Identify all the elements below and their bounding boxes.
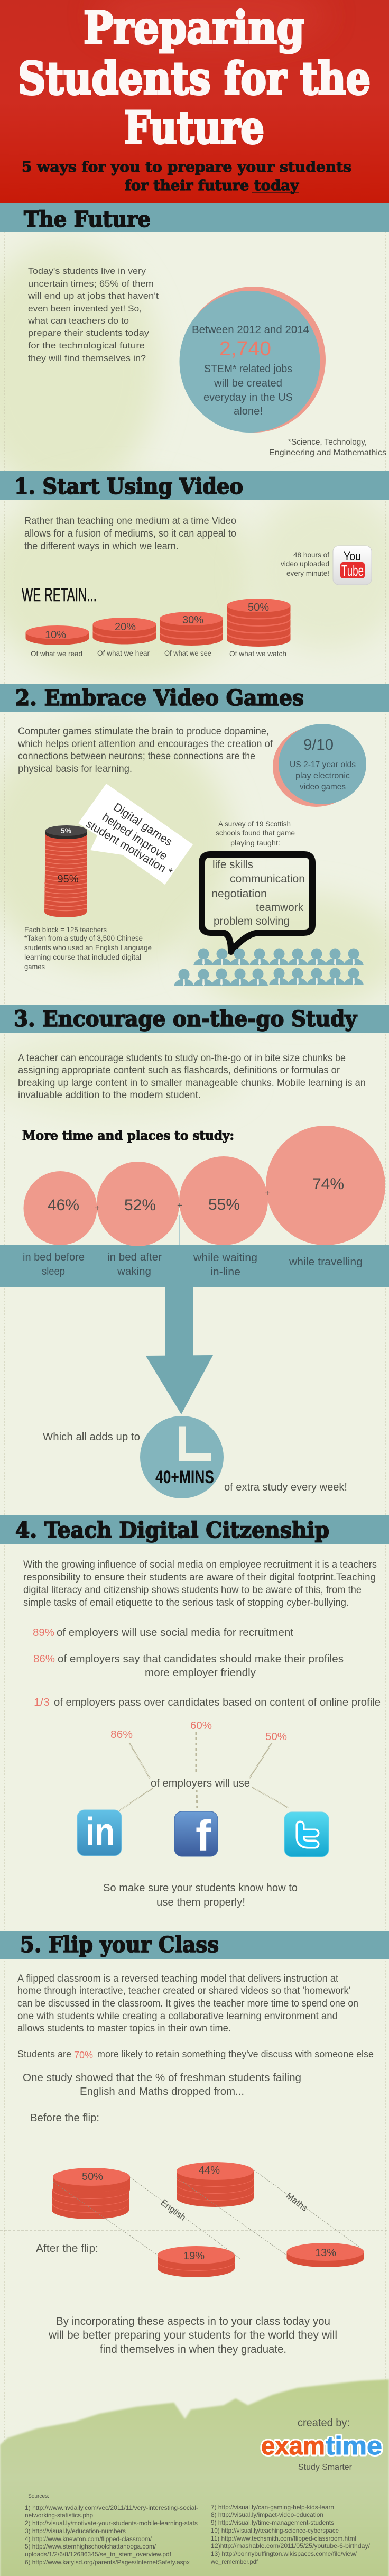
percentages: 86% xyxy=(110,1729,133,1741)
intro paragraph: uncertain times; 65% of them xyxy=(28,279,154,289)
games paragraph: physical basis for learning. xyxy=(18,763,132,775)
sources column left xyxy=(25,2504,198,2566)
credit: examtime logo: time xyxy=(326,2432,382,2460)
teachers footnote: *Taken from a study of 3,500 Chinese xyxy=(24,934,143,942)
heading: we retain: WE RETAIN... xyxy=(22,585,97,605)
sources column left: 6) http://www.katyisd.org/parents/Pages/InternetSafety.aspx xyxy=(25,2559,190,2566)
teachers footnote xyxy=(24,925,152,971)
stack: before 44% xyxy=(177,2162,254,2207)
band: The Future xyxy=(0,203,389,232)
employer statistics: of employers say that candidates should make their profiles xyxy=(58,1653,344,1665)
text: adds up to: Which all adds up to xyxy=(43,1431,140,1443)
flip paragraph xyxy=(17,1973,358,2034)
coin chart: before and after the flip: Maths xyxy=(284,2191,310,2213)
stack: after 19% xyxy=(158,2246,235,2277)
intro paragraph: Today's students live in very xyxy=(28,266,146,276)
clock: 40+ mins xyxy=(140,1416,224,1498)
stack: before 50% xyxy=(52,2168,130,2219)
band: 4. Teach Digital Citzenship: 4. Teach Digital Citzenship xyxy=(15,1517,329,1543)
stat circle: STEM jobs: will be created xyxy=(214,378,282,389)
sources column right xyxy=(210,2504,371,2565)
cylinder chart: 95% / 5% xyxy=(44,825,87,917)
intro paragraph xyxy=(27,266,159,363)
flip paragraph: one with students while creating a collaborative learning environment and xyxy=(17,2011,338,2022)
speech bubble: skills: life skills xyxy=(212,859,253,871)
games paragraph: Computer games stimulate the brain to produce dopamine, xyxy=(18,726,269,737)
stack: 30% see: 30% xyxy=(182,614,203,626)
band: study location labels: waking xyxy=(117,1266,151,1277)
flip paragraph: home through interactive, teacher created or shared videos so that 'homework' xyxy=(17,1985,350,1997)
speech bubble: skills: problem solving xyxy=(214,915,290,927)
sources xyxy=(25,2493,371,2566)
title xyxy=(18,2,371,154)
study paragraph xyxy=(18,1053,366,1101)
survey caption: playing taught: xyxy=(230,839,280,847)
stack: before 44%: 44% xyxy=(199,2165,220,2176)
band: 1. Start Using Video: 1. Start Using Video xyxy=(14,474,243,499)
subheading: more time: More time and places to study: xyxy=(22,1128,234,1143)
connector lines xyxy=(119,1732,288,1811)
intro paragraph: even been invented yet! So, xyxy=(28,303,142,314)
stat circle: 9/10: 9/10 xyxy=(303,737,334,753)
stack: before 50%: 50% xyxy=(82,2171,103,2183)
stack: 20% hear: 20% xyxy=(115,621,136,633)
stat circle: 9/10: US 2-17 year olds xyxy=(290,760,356,769)
study paragraph: A teacher can encourage students to study on-the-go or in bite size chunks be xyxy=(18,1053,346,1064)
band: study location labels xyxy=(0,1245,389,1287)
stat circle: STEM jobs: everyday in the US xyxy=(203,392,293,403)
credit: examtime logo: Study Smarter xyxy=(298,2463,353,2472)
credit: examtime logo xyxy=(261,2417,382,2472)
clock: 40+ mins: 40+MINS xyxy=(155,1467,214,1487)
band: study location labels: sleep xyxy=(42,1266,65,1277)
stack: 50% watch: 50% xyxy=(248,602,269,613)
intro paragraph: what can teachers do to xyxy=(27,316,129,326)
video paragraph: Rather than teaching one medium at a time Video xyxy=(24,516,236,527)
band: study location labels: in bed after xyxy=(107,1252,162,1263)
video paragraph: allows for a fusion of mediums, so it can appeal to xyxy=(24,528,236,539)
stack: 50% watch xyxy=(227,599,291,658)
label: after the flip: After the flip: xyxy=(36,2243,98,2255)
callout: digital games motivation: student motivation * xyxy=(84,817,175,879)
text: use them properly xyxy=(103,1882,298,1908)
social media diagram xyxy=(77,1720,329,1860)
stack: after 13%: 13% xyxy=(315,2247,336,2259)
YouTube stat text: 48 hours of xyxy=(293,550,329,559)
employer statistics: 1/3 xyxy=(34,1697,50,1708)
title: Future xyxy=(124,102,264,154)
citizenship paragraph: With the growing influence of social media on employee recruitment it is a teachers xyxy=(23,1559,377,1570)
STEM footnote xyxy=(269,438,386,457)
study intro: English and Maths dropped from... xyxy=(80,2086,244,2097)
games paragraph: connections between neurons; these connections are the xyxy=(18,751,255,762)
flip paragraph: can be discussed in the classroom. It gives the teacher more time to spend one on xyxy=(17,1998,358,2009)
band: 3. Encourage on-the-go Study: 3. Encourage on-the-go Study xyxy=(14,1006,357,1032)
coin chart: retention xyxy=(25,599,291,658)
callout: digital games motivation xyxy=(78,784,193,885)
percentages: 50% xyxy=(265,1731,287,1743)
study paragraph: assigning appropriate content such as flashcards, definitions or formulas or xyxy=(18,1065,340,1076)
social media diagram: of employers will use xyxy=(151,1778,250,1789)
study intro: One study showed that the % of freshman students failing xyxy=(23,2072,301,2084)
sources column left: 1) http://www.nvdaily.com/vec/2011/11/very-interesting-social- xyxy=(25,2504,198,2511)
sources column left: 2) http://visual.ly/motivate-your-students-mobile-learning-stats xyxy=(25,2519,198,2527)
employer statistics: more employer friendly xyxy=(145,1667,256,1679)
stack: 10% read: 10% xyxy=(45,629,66,641)
band: 5. Flip your Class: 5. Flip your Class xyxy=(20,1932,219,1957)
sources column right: 11) http://www.techsmith.com/flipped-classroom.html xyxy=(211,2535,356,2542)
band: The Future: The Future xyxy=(24,207,151,232)
survey caption: schools found that game xyxy=(216,829,295,837)
text: extra study: of extra study every week! xyxy=(224,1482,347,1493)
intro paragraph: prepare their students today xyxy=(28,328,150,338)
sources column left: 3) http://visual.ly/education-numbers xyxy=(25,2527,126,2535)
footer green wash xyxy=(0,2379,389,2576)
sources column left: networking-statistics.php xyxy=(25,2511,93,2519)
sources column right: 12)http://mashable.com/2011/05/25/youtube-6-birthday/ xyxy=(211,2542,371,2550)
band: 1. Start Using Video xyxy=(0,471,389,500)
employer statistics xyxy=(33,1627,381,1708)
sources column right: 9) http://visual.ly/time-management-students xyxy=(211,2519,334,2526)
closing statement: find themselves in when they graduate. xyxy=(100,2343,286,2356)
icon: YouTube xyxy=(333,546,372,585)
STEM footnote: Engineering and Mathemathics xyxy=(269,448,386,457)
callout: digital games motivation: helped improve xyxy=(100,810,170,863)
sources column right: 13) http://bonnybuffington.wikispaces.come/file/view/ xyxy=(211,2550,357,2557)
bubble chart: study moments: + xyxy=(95,1203,100,1213)
arrow down xyxy=(146,1285,213,1414)
stack: 10% read xyxy=(25,625,89,658)
games paragraph: which helps orient attention and encourages the creation of xyxy=(17,739,273,750)
sources column right: we_remember.pdf xyxy=(210,2558,258,2565)
bubble chart: study moments: + xyxy=(177,1200,182,1210)
band: 2. Embrace Video Games: 2. Embrace Video Games xyxy=(15,685,304,711)
cylinder chart: 95% / 5%: 5% xyxy=(61,826,72,835)
stack: 20% hear xyxy=(93,618,156,657)
subtitle: 5 ways for you to prepare your students xyxy=(22,159,351,176)
games paragraph xyxy=(17,726,273,775)
icon: LinkedIn: in xyxy=(86,1809,115,1854)
closing statement: will be better preparing your students for the world they will xyxy=(48,2329,337,2341)
bubble chart: study moments: 74% xyxy=(312,1175,344,1193)
credit: examtime logo: time xyxy=(326,2432,382,2460)
YouTube stat text xyxy=(281,550,329,577)
speech bubble: skills xyxy=(202,854,312,952)
callout: digital games motivation: Digital games xyxy=(111,800,175,849)
study intro xyxy=(23,2072,301,2097)
flow lines xyxy=(53,2170,361,2259)
intro paragraph: they will find themselves in? xyxy=(28,353,146,363)
coin chart: before and after the flip xyxy=(0,2162,389,2277)
citizenship paragraph: digital literacy and citizenship shows students how to be aware of this, from the xyxy=(23,1585,362,1596)
stat circle: STEM jobs: Between 2012 and 2014 xyxy=(192,324,309,336)
study paragraph: breaking up large content in to smaller manageable chunks. Mobile learning is an xyxy=(18,1078,366,1089)
stack: 10% read: Of what we read xyxy=(31,649,82,658)
sources: Sources: xyxy=(28,2493,49,2499)
bubble chart: study moments: 52% xyxy=(124,1197,156,1214)
teachers footnote: learning course that included digital xyxy=(24,953,141,961)
citizenship paragraph: simple tasks of email etiquette to the serious task of stopping cyber-bullying. xyxy=(23,1597,349,1608)
stat circle: STEM jobs: 2,740 xyxy=(219,338,271,360)
retention statement: Students are xyxy=(17,2049,71,2059)
teachers footnote: games xyxy=(24,962,45,971)
video paragraph xyxy=(24,516,236,552)
band: 5. Flip your Class xyxy=(0,1931,389,1959)
video paragraph: the different ways in which we learn. xyxy=(24,541,179,552)
stat circle: STEM jobs xyxy=(180,287,326,433)
survey caption xyxy=(216,820,295,847)
title: Preparing xyxy=(84,2,304,54)
employer statistics: of employers will use social media for recruitment xyxy=(57,1627,293,1639)
icon: Twitter xyxy=(284,1812,329,1857)
band: study location labels: while travelling xyxy=(289,1256,363,1268)
icon: Facebook: f xyxy=(196,1812,211,1860)
bubble chart: study moments: 46% xyxy=(48,1197,79,1214)
band: study location labels: while waiting xyxy=(193,1252,257,1264)
intro paragraph: for the technological future xyxy=(28,341,145,351)
cylinder chart: 95% / 5%: 95% xyxy=(57,873,79,885)
STEM footnote: *Science, Technology, xyxy=(288,438,367,447)
sources column left: 5) http://www.stemhighschoolchattanooga.com/ xyxy=(25,2543,156,2550)
sources column left: 4) http://www.knewton.com/flipped-classroom/ xyxy=(25,2535,152,2543)
credit: examtime logo: exam xyxy=(261,2432,325,2460)
icon: YouTube: You xyxy=(344,549,361,564)
stack: after 19%: 19% xyxy=(183,2250,205,2262)
percentages: 60% xyxy=(190,1720,212,1732)
coin chart: before and after the flip: English xyxy=(159,2197,188,2223)
flip paragraph: A flipped classroom is a reversed teaching model that delivers instruction at xyxy=(17,1973,339,1984)
YouTube stat text: video uploaded xyxy=(281,559,329,568)
stack: 30% see: Of what we see xyxy=(164,649,211,657)
stack: 30% see xyxy=(160,612,223,657)
stat circle: 9/10: video games xyxy=(300,783,346,792)
percentages xyxy=(110,1720,287,1743)
subtitle: for their future today xyxy=(125,178,299,194)
sources column left: uploads/1/2/6/8/12686345/se_tn_stem_overview.pdf xyxy=(25,2551,172,2558)
intro paragraph: will end up at jobs that haven't xyxy=(27,291,159,301)
retention statement: 70% xyxy=(74,2050,93,2060)
icon: Facebook xyxy=(174,1811,218,1860)
label: before the flip: Before the flip: xyxy=(30,2112,99,2124)
study paragraph: invaluable addition to the modern student. xyxy=(18,1090,201,1101)
speech bubble: skills: teamwork xyxy=(256,901,303,914)
header panel xyxy=(0,0,389,203)
employer statistics: 89% xyxy=(33,1627,54,1639)
band: study location labels: in bed before xyxy=(23,1252,85,1263)
survey caption: A survey of 19 Scottish xyxy=(218,820,291,828)
text: use them properly: use them properly! xyxy=(156,1897,245,1908)
subtitle xyxy=(22,159,351,194)
flip paragraph: allows students to master topics in their own time. xyxy=(17,2023,231,2034)
closing statement xyxy=(48,2315,337,2356)
stat circle: 9/10 xyxy=(273,724,366,807)
closing statement: By incorporating these aspects in to your class today you xyxy=(56,2315,330,2327)
text: use them properly: So make sure your students know how to xyxy=(103,1882,298,1894)
speech bubble: skills: negotiation xyxy=(211,888,267,900)
icon: YouTube: Tube xyxy=(341,563,364,579)
audience of people icons xyxy=(174,949,364,986)
sources column right: 7) http://visual.ly/can-gaming-help-kids-learn xyxy=(211,2504,334,2511)
teachers footnote: students who used an English Language xyxy=(24,943,152,952)
stack: 50% watch: Of what we watch xyxy=(229,649,286,658)
stack: after 13% xyxy=(286,2243,364,2267)
bubble chart: study moments: 55% xyxy=(208,1196,240,1213)
sources column right: 8) http://visual.ly/impact-video-education xyxy=(211,2511,323,2518)
sources column right: 10) http://visual.ly/teaching-science-cyberspace xyxy=(211,2527,339,2534)
credit: examtime logo: exam xyxy=(261,2432,325,2460)
employer statistics: of employers pass over candidates based on content of online profile xyxy=(54,1697,381,1708)
speech bubble: skills: communication xyxy=(230,873,305,885)
band: study location labels: in-line xyxy=(210,1266,240,1278)
retention statement: more likely to retain something they've discuss with someone else xyxy=(97,2049,374,2059)
citizenship paragraph xyxy=(23,1559,377,1608)
employer statistics: 86% xyxy=(33,1653,55,1665)
bubble chart: study moments: + xyxy=(265,1188,270,1198)
citizenship paragraph: responsibility to ensure their students are aware of their digital footprint.Teaching xyxy=(23,1572,376,1583)
teachers footnote: Each block = 125 teachers xyxy=(24,925,107,934)
stack: 20% hear: Of what we hear xyxy=(97,649,150,657)
credit: examtime logo: created by: xyxy=(298,2417,350,2429)
YouTube stat text: every minute! xyxy=(286,569,329,577)
stat circle: STEM jobs: alone! xyxy=(234,406,263,417)
bubble chart: study moments xyxy=(23,1126,385,1246)
stat circle: 9/10: play electronic xyxy=(295,771,350,780)
stat circle: STEM jobs: STEM* related jobs xyxy=(204,363,292,375)
